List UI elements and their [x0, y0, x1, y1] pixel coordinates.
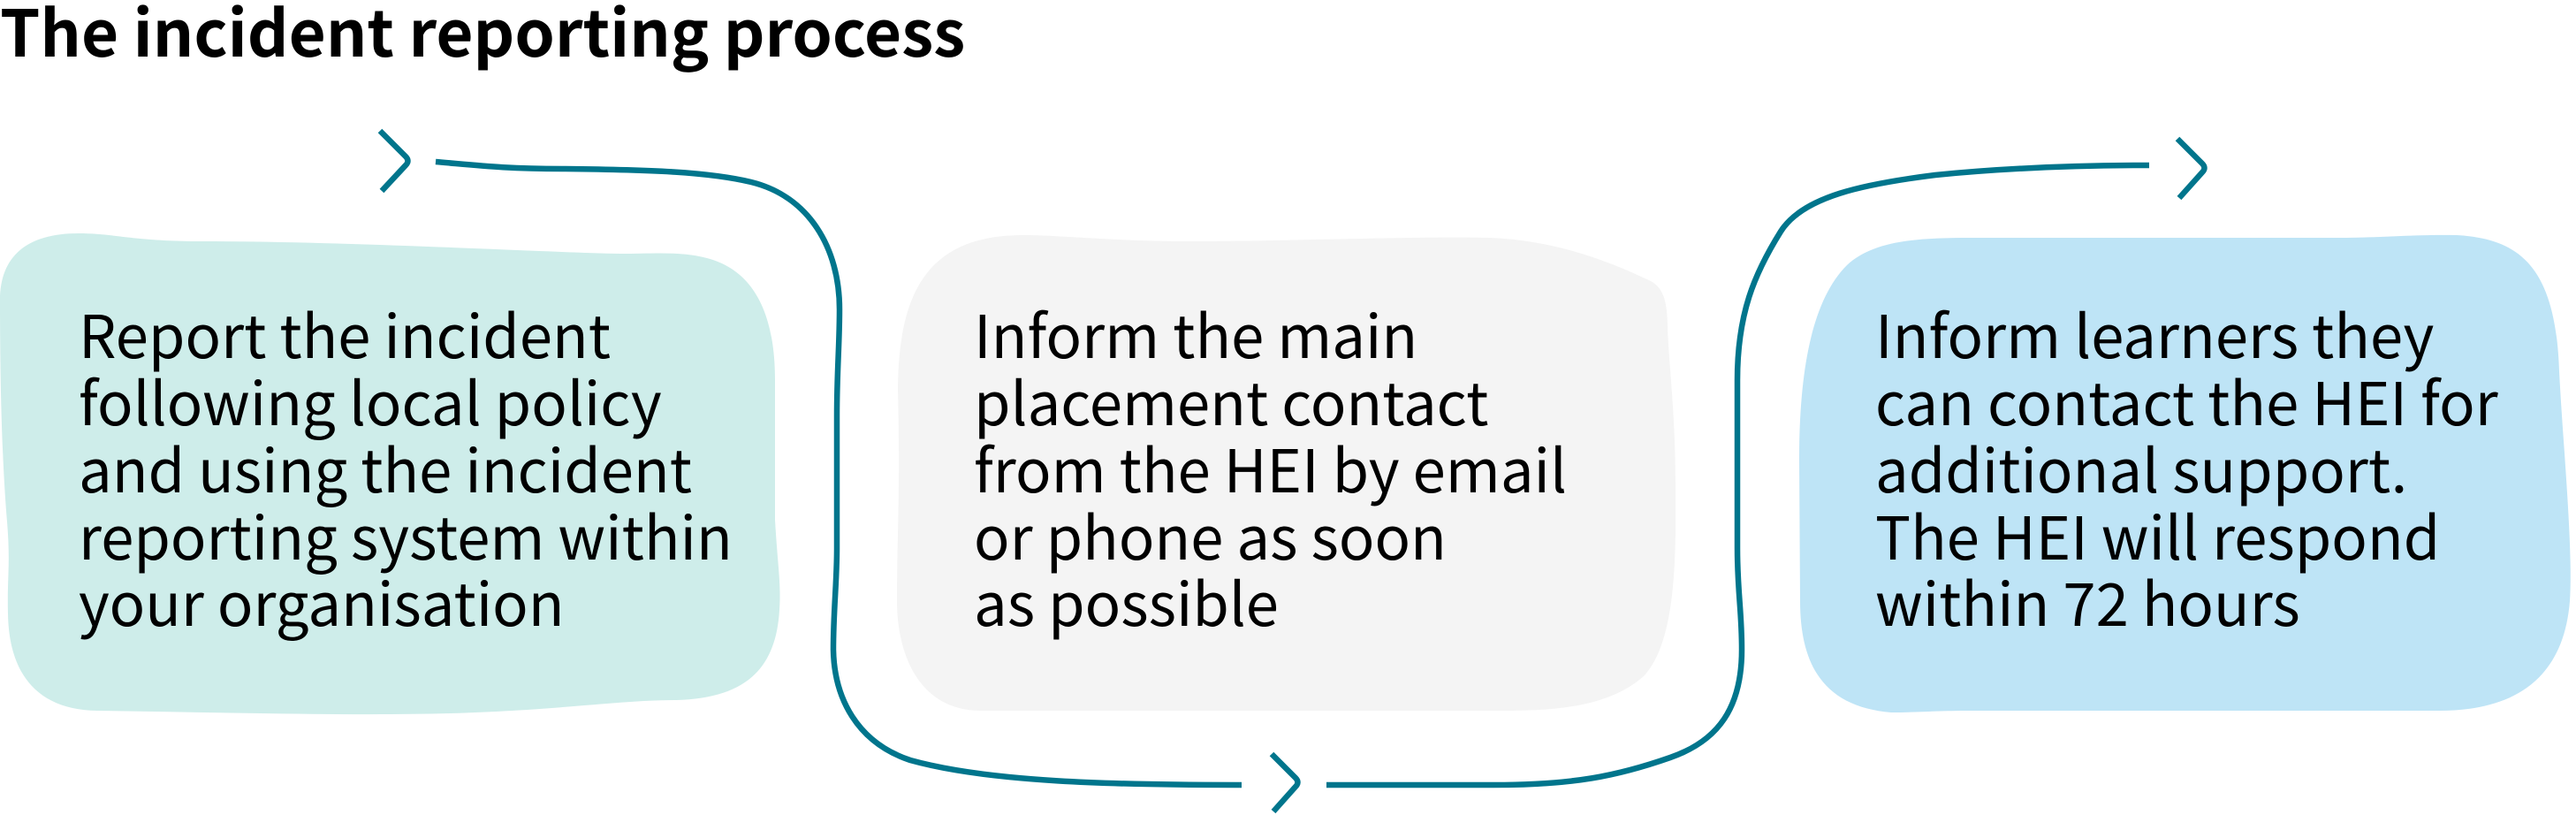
panel text: Report the incident [79, 290, 611, 376]
arrow: middle chevron [1272, 754, 1297, 811]
panel text: as possible [974, 558, 1279, 644]
panel text: your organisation [79, 558, 565, 644]
panel text: from the HEI by email [974, 424, 1567, 510]
panel background: blue [1799, 235, 2571, 712]
panel text: within 72 hours [1875, 558, 2300, 644]
panel text: Inform the main [974, 290, 1417, 376]
arrow: connector from second to third step [1326, 165, 2149, 785]
arrow: connector from first to second step [436, 162, 1242, 785]
panel text: Inform learners they [1875, 290, 2434, 376]
panel text [1875, 290, 2499, 644]
panel text [79, 290, 733, 644]
panel text: and using the incident [79, 424, 692, 510]
panel background: green [0, 233, 780, 714]
panel text: The HEI will respond [1875, 491, 2440, 577]
panel background: grey [897, 235, 1676, 711]
panel text [974, 290, 1567, 644]
panel: inform the main placement contact [897, 235, 1676, 711]
panel: report the incident [0, 233, 780, 714]
arrow: last chevron [2177, 139, 2204, 198]
panel: inform learners [1799, 235, 2571, 712]
panel text: can contact the HEI for [1875, 357, 2499, 443]
panel text: reporting system within [79, 491, 733, 577]
panel text: or phone as soon [974, 491, 1447, 577]
panel text: additional support. [1875, 424, 2407, 510]
arrow: first chevron [380, 131, 408, 191]
panel text: following local policy [79, 357, 662, 443]
panel text: placement contact [974, 357, 1488, 443]
